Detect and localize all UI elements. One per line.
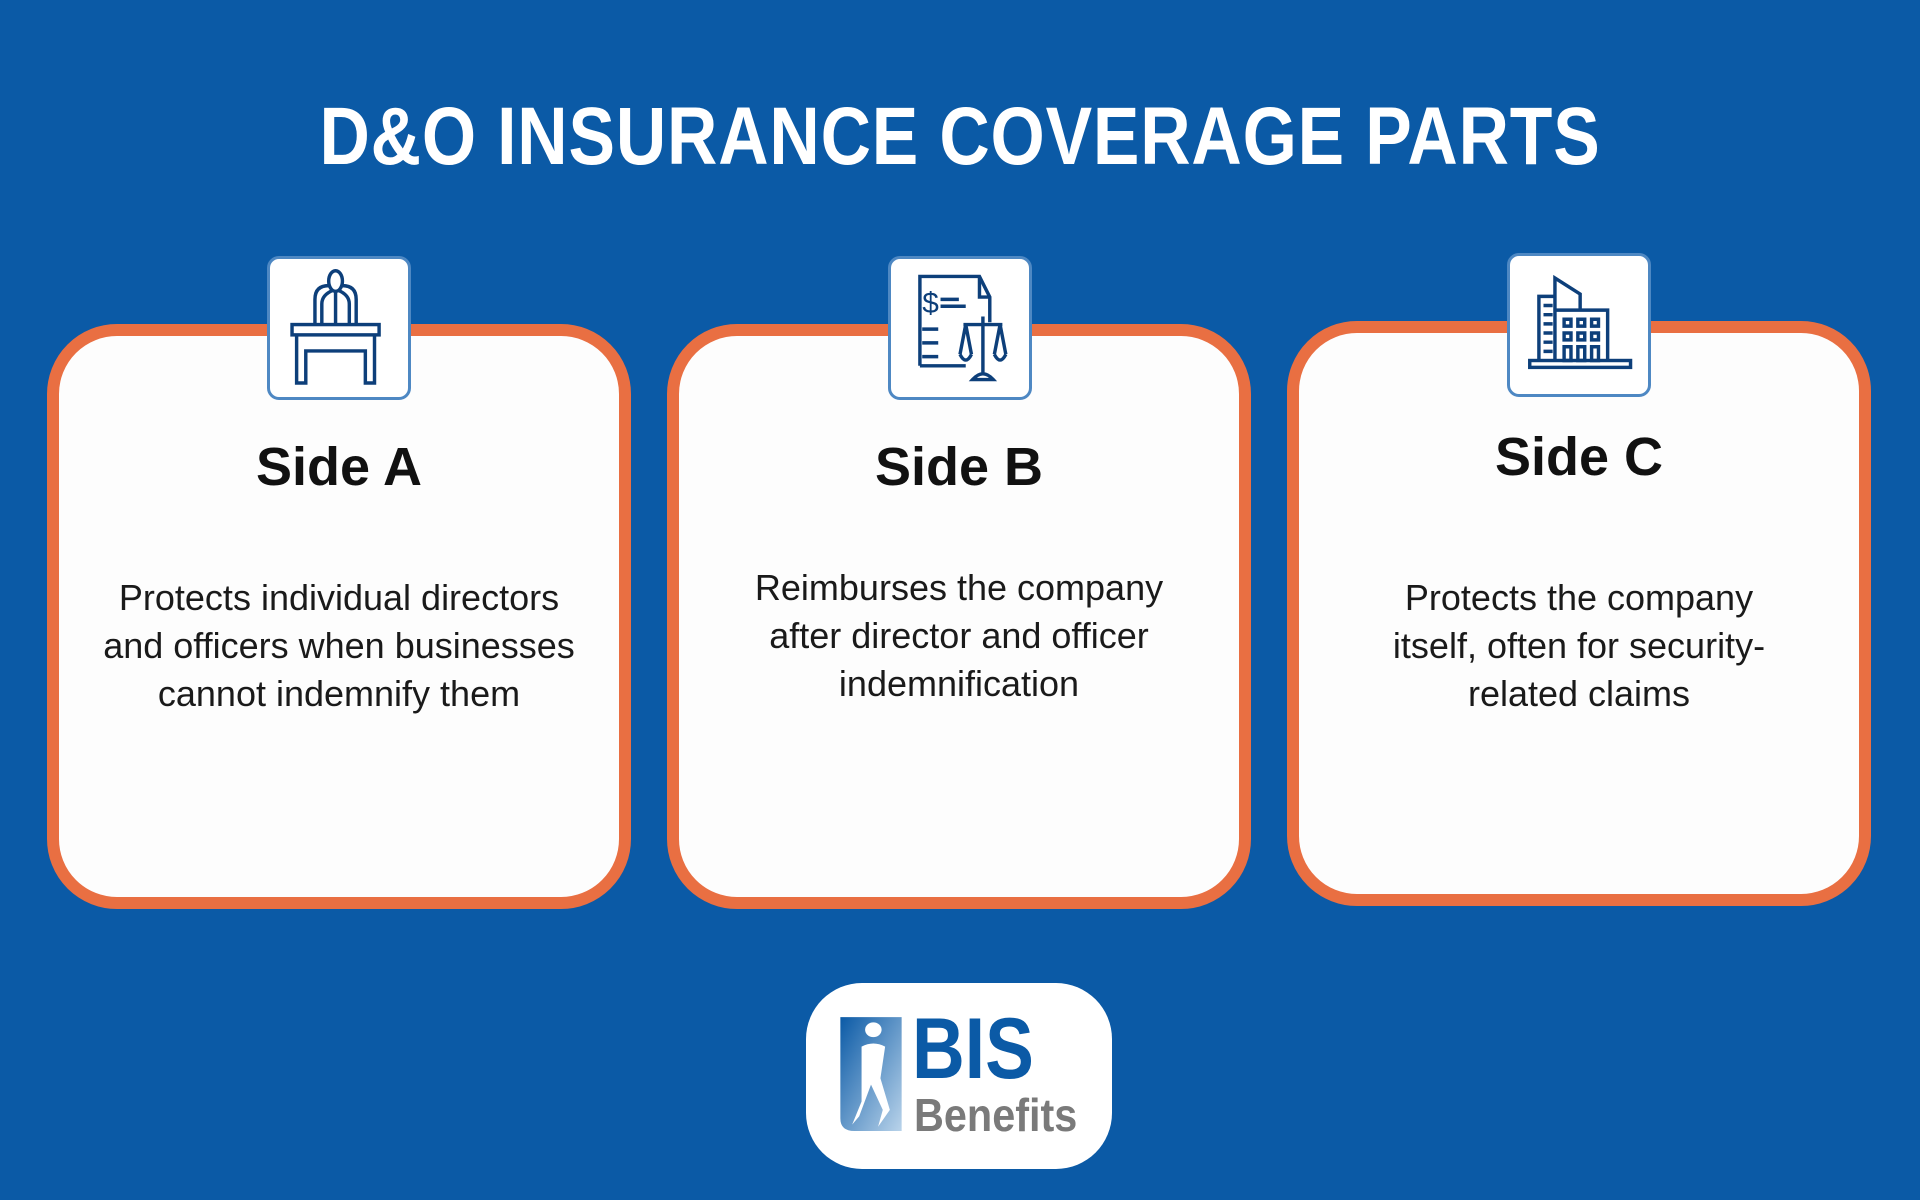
logo text: BIS <box>912 1001 1034 1097</box>
text: side B <box>755 567 1163 704</box>
panel: side B <box>667 324 1251 909</box>
heading: Side A: Side A <box>256 437 422 497</box>
text: side A <box>103 577 575 714</box>
text: side A: cannot indemnify them <box>158 673 520 714</box>
text: side B: Reimburses the company <box>755 567 1163 608</box>
logo mark <box>840 1017 902 1131</box>
text: side A: Protects individual directors <box>119 577 559 618</box>
title: D&O INSURANCE COVERAGE PARTS <box>319 91 1601 182</box>
heading: Side B: Side B <box>875 437 1043 497</box>
text: side A: and officers when businesses <box>103 625 575 666</box>
icon: document with scales <box>888 256 1032 400</box>
text: side B: indemnification <box>839 663 1079 704</box>
logo: Benefits <box>914 1089 1077 1141</box>
panel: side A <box>47 324 631 909</box>
text: side C: Protects the company <box>1405 577 1753 618</box>
text: side C: itself, often for security- <box>1393 625 1765 666</box>
icon: building <box>1507 253 1651 397</box>
logo <box>806 983 1112 1169</box>
heading: Side C: Side C <box>1495 427 1663 487</box>
text: side B: after director and officer <box>769 615 1149 656</box>
icon: person at desk <box>267 256 411 400</box>
text: side C <box>1393 577 1765 714</box>
icon: document with scales: $ <box>922 287 939 320</box>
panel: side C <box>1287 321 1871 906</box>
text: side C: related claims <box>1468 673 1690 714</box>
